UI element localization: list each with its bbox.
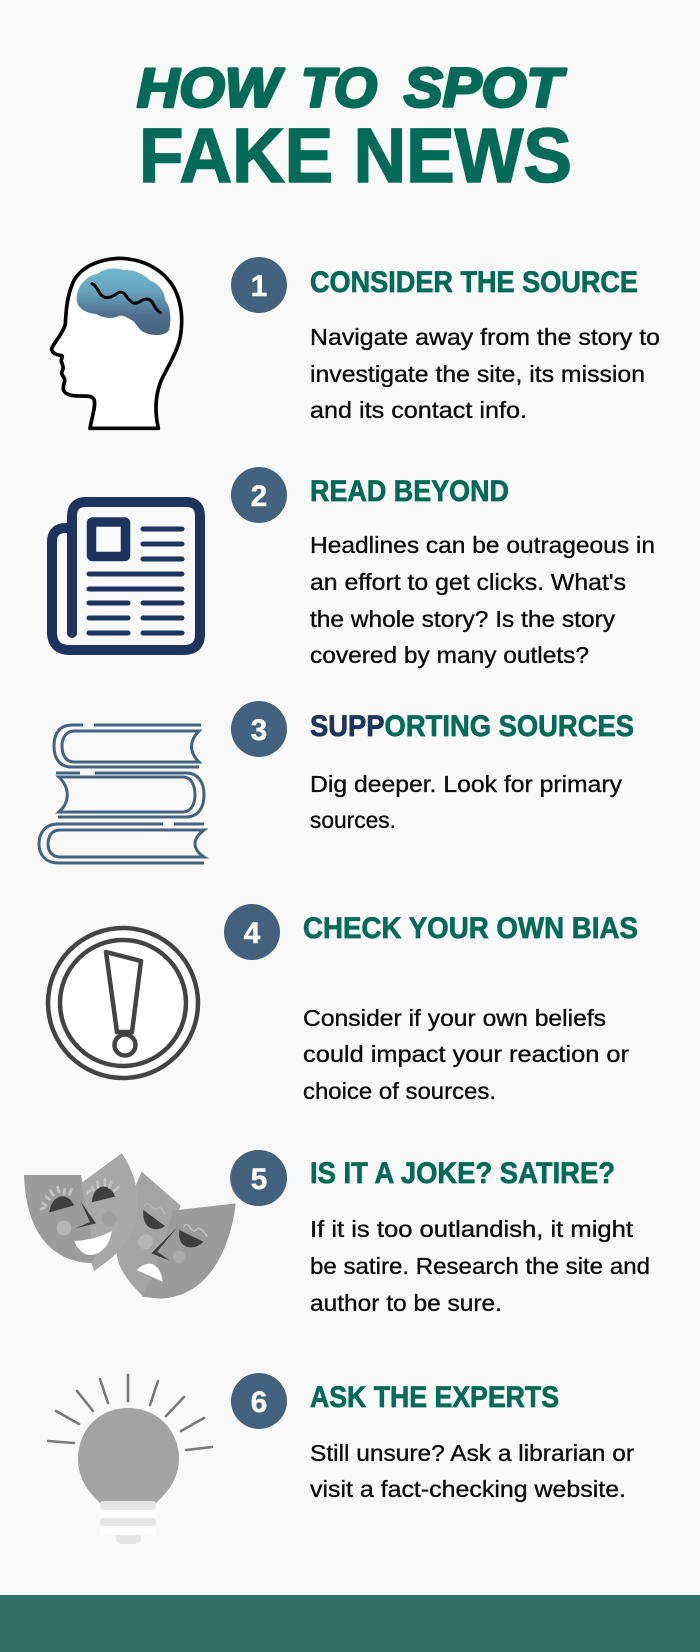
body text: could impact your reaction or bbox=[303, 1041, 629, 1067]
panel: read beyond bbox=[52, 467, 655, 668]
number badge 5 bbox=[230, 1150, 287, 1206]
footer band bbox=[0, 1595, 700, 1652]
heading: CHECK YOUR OWN BIAS bbox=[303, 912, 638, 945]
body text bbox=[310, 1440, 634, 1502]
heading: READ BEYOND bbox=[310, 475, 509, 508]
body text: be satire. Research the site and bbox=[310, 1253, 650, 1279]
body text bbox=[303, 1005, 629, 1104]
panel: check your own bias bbox=[48, 904, 638, 1104]
body text: Navigate away from the story to bbox=[310, 324, 660, 350]
icon: newspaper bbox=[52, 502, 200, 650]
body text: choice of sources. bbox=[303, 1078, 496, 1104]
panel: is it a joke bbox=[24, 1150, 650, 1316]
panel: consider the source bbox=[52, 257, 660, 428]
bulb rays bbox=[48, 1375, 212, 1450]
number badge 4: 4 bbox=[244, 917, 261, 950]
title line: how to spot bbox=[137, 56, 567, 118]
number badge 3: 3 bbox=[251, 714, 267, 747]
body text bbox=[310, 324, 660, 423]
title line: how to spot: SPOT bbox=[404, 56, 567, 118]
icon: light bulb bbox=[48, 1375, 212, 1544]
body text: the whole story? Is the story bbox=[310, 606, 616, 632]
icon detail: brain bbox=[77, 269, 170, 335]
body text: visit a fact-checking website. bbox=[310, 1476, 626, 1502]
body text: and its contact info. bbox=[310, 397, 527, 423]
body text: sources. bbox=[310, 807, 396, 833]
number badge 5: 5 bbox=[251, 1163, 267, 1196]
icon: head with brain bbox=[52, 258, 182, 428]
icon: exclamation mark in circle bbox=[48, 928, 198, 1078]
number badge 6 bbox=[231, 1373, 287, 1429]
heading: IS IT A JOKE? SATIRE? bbox=[310, 1157, 615, 1190]
body text bbox=[310, 1216, 650, 1316]
title bbox=[137, 56, 572, 199]
title line: fake news: FAKE NEWS bbox=[139, 113, 572, 199]
heading: ASK THE EXPERTS bbox=[310, 1381, 559, 1414]
body text: an effort to get clicks. What's bbox=[310, 569, 626, 595]
heading: SUPPORTING SOURCES bbox=[310, 710, 634, 743]
body text: Consider if your own beliefs bbox=[303, 1005, 606, 1031]
number badge 4 bbox=[224, 904, 280, 960]
sad mask bbox=[117, 1172, 236, 1299]
icon detail: brain fold bbox=[92, 284, 160, 312]
number badge 1 bbox=[231, 257, 287, 313]
icon: theatre masks bbox=[24, 1153, 236, 1299]
number badge 1: 1 bbox=[251, 270, 267, 303]
title line: how to spot: HOW bbox=[137, 56, 284, 118]
icon: stack of books bbox=[39, 725, 204, 863]
panel: supporting sources bbox=[39, 701, 634, 863]
happy mask bbox=[24, 1153, 138, 1271]
body text: Headlines can be outrageous in bbox=[310, 532, 655, 558]
number badge 6: 6 bbox=[251, 1386, 267, 1419]
number badge 2: 2 bbox=[251, 480, 267, 513]
panel: ask the experts bbox=[48, 1373, 634, 1544]
body text: Still unsure? Ask a librarian or bbox=[310, 1440, 634, 1466]
number badge 3 bbox=[231, 701, 287, 757]
heading: CONSIDER THE SOURCE bbox=[310, 266, 638, 299]
title line: how to spot: TO bbox=[301, 56, 377, 118]
body text bbox=[310, 532, 655, 668]
body text: Dig deeper. Look for primary bbox=[310, 771, 623, 797]
body text bbox=[310, 771, 623, 833]
number badge 2 bbox=[231, 467, 287, 523]
body text: covered by many outlets? bbox=[310, 642, 589, 668]
body text: investigate the site, its mission bbox=[310, 361, 645, 387]
body text: If it is too outlandish, it might bbox=[310, 1216, 634, 1242]
body text: author to be sure. bbox=[310, 1290, 502, 1316]
